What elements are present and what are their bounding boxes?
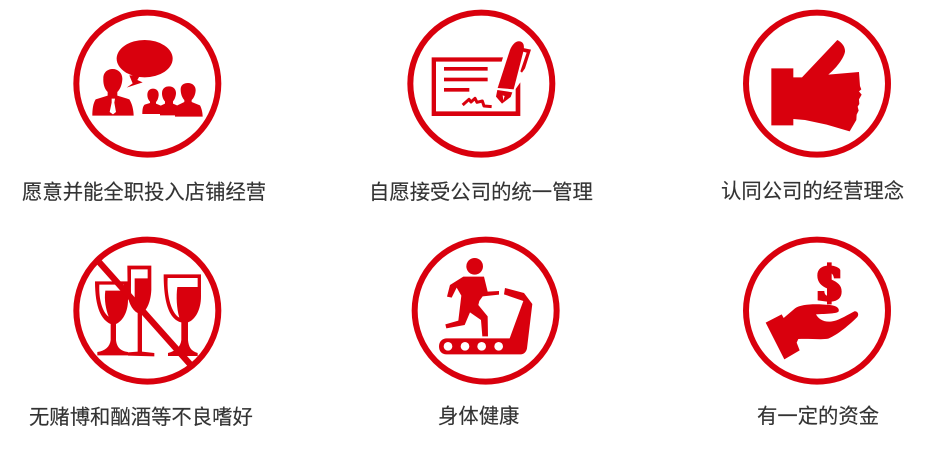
icon: no wine glasses — [76, 240, 218, 382]
right wine glass — [164, 274, 201, 356]
label: accept unified management: 自愿接受公司的统一管理 — [369, 181, 593, 204]
label: agree with business philosophy: 认同公司的经营理念 — [721, 179, 904, 203]
label: no bad habits: 无赌博和酗酒等不良嗜好 — [29, 406, 253, 429]
label: some capital: 有一定的资金 — [757, 405, 879, 428]
label: full-time store commitment: 愿意并能全职投入店铺经营 — [22, 181, 266, 204]
label: good health: 身体健康 — [438, 405, 519, 428]
icon: hand holding dollar — [746, 240, 888, 382]
icon: signing a document with a pen — [410, 13, 552, 155]
middle wine glass — [127, 266, 154, 356]
icon: people in discussion — [76, 13, 218, 155]
icon: thumbs up — [746, 13, 888, 155]
icon: person running on treadmill — [415, 240, 557, 382]
prohibition slash — [99, 262, 191, 366]
left wine glass — [95, 281, 128, 355]
